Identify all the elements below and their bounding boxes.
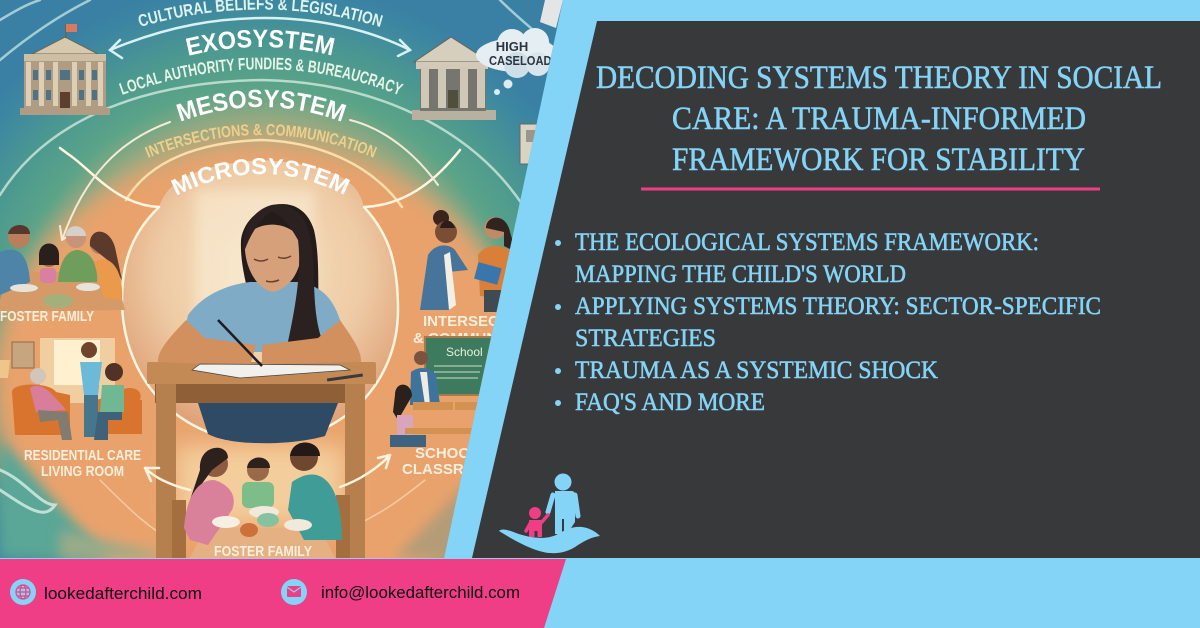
label: foster family bottom: FOSTER FAMILY: [214, 543, 312, 560]
girl face: [245, 225, 301, 292]
icon: left government building: [20, 24, 110, 115]
website text: lookedafterchild.com: [44, 584, 202, 603]
bullet list: MAPPING THE CHILD'S WORLD: [575, 261, 906, 288]
notebook and pencil: [192, 320, 363, 381]
email text: info@lookedafterchild.com: [321, 583, 520, 602]
callout: high caseloads cloud: [476, 28, 560, 95]
curved heading: microsystem: MICROSYSTEM: [170, 158, 350, 195]
arrows: microsystem to neighbours: [145, 455, 390, 490]
girl shirt: [180, 282, 345, 352]
scene: girl writing at desk: [147, 204, 376, 558]
icon: right government building: [412, 37, 496, 120]
bullet list: FAQ'S AND MORE: [575, 389, 765, 416]
desk: [147, 362, 376, 558]
girl arms: [158, 320, 361, 366]
label: school classroom: [402, 448, 468, 474]
title: [596, 60, 1162, 178]
icon: mail: [281, 579, 307, 605]
scene: foster family at table, bottom centre: [172, 442, 350, 558]
panel: dark content panel: [472, 21, 1200, 558]
callout: high caseloads cloud: HIGH: [496, 39, 528, 54]
curved heading: mesosystem: MESOSYSTEM: [176, 90, 346, 122]
scene: school classroom: School: [446, 345, 483, 359]
title underline: [641, 188, 1100, 190]
icon: logo adult, child and wave: [499, 474, 600, 553]
label: intersections and communication right: [414, 316, 496, 343]
curved heading: local authority: LOCAL AUTHORITY FUNDIES & BUREAUCRACY: [119, 58, 404, 95]
bullet list: [555, 229, 1101, 416]
scene: residential care living room: [0, 338, 142, 440]
curved heading: intersections and communication: INTERSECTIONS & COMMUNICATION: [144, 124, 377, 158]
curved heading: exosystem: EXOSYSTEM: [186, 30, 335, 56]
label: intersections and communication right: INTERSECTIONS: [423, 313, 545, 330]
scene: school classroom: [390, 337, 495, 447]
title: FRAMEWORK FOR STABILITY: [672, 142, 1085, 178]
bullet list: STRATEGIES: [575, 325, 716, 352]
system ring arcs: [0, 0, 556, 545]
girl jeans: [198, 403, 338, 443]
icon: clipboard and paper: [520, 0, 563, 164]
scene: two professionals talking: [420, 210, 516, 312]
bullet list: THE ECOLOGICAL SYSTEMS FRAMEWORK:: [575, 229, 1039, 256]
label: foster family left: FOSTER FAMILY: [0, 309, 94, 325]
illustration: nested ecological systems: [0, 0, 563, 558]
bullet list: APPLYING SYSTEMS THEORY: SECTOR-SPECIFIC: [575, 293, 1101, 320]
girl features: [254, 256, 291, 282]
label: residential care living room: [24, 450, 140, 476]
bullet list: TRAUMA AS A SYSTEMIC SHOCK: [575, 357, 938, 384]
label: residential care living room: LIVING ROOM: [41, 464, 124, 480]
label: school classroom: SCHOOL: [415, 445, 479, 462]
label: intersections and communication right: & COMMUNICATION: [413, 330, 558, 347]
girl fringe and long hair: [243, 204, 322, 352]
title: CARE: A TRAUMA-INFORMED: [672, 101, 1086, 137]
label: residential care living room: RESIDENTIAL CARE: [24, 448, 141, 464]
label: school classroom: CLASSROOM: [402, 461, 500, 478]
footer: pink contact bar: [0, 559, 566, 628]
callout: high caseloads cloud: CASELOADS: [489, 53, 559, 68]
scene: foster family, top left: [0, 225, 125, 312]
icon: globe: [10, 579, 36, 605]
girl hair back: [240, 204, 318, 289]
